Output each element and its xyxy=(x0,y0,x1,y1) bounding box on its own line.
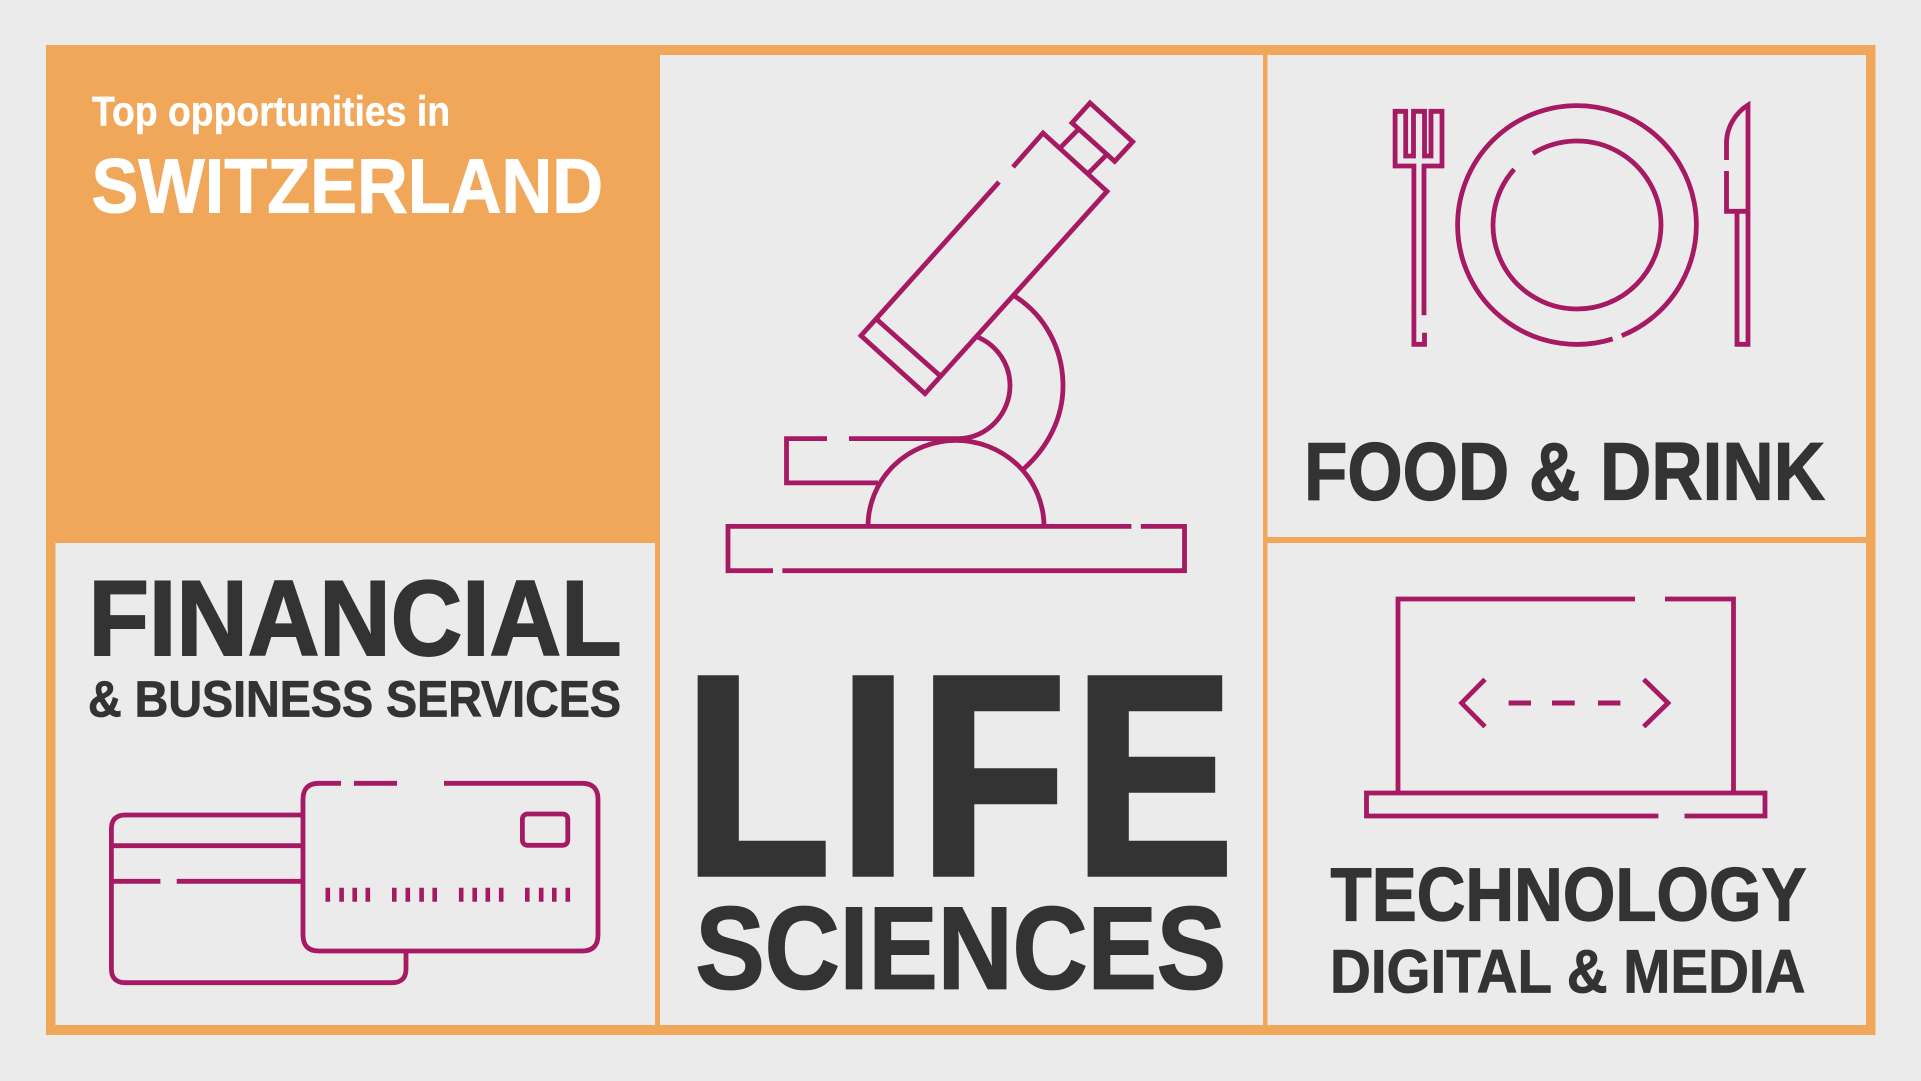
subheading: business services: & BUSINESS SERVICES xyxy=(88,670,621,727)
laptop screen xyxy=(1398,599,1734,791)
plate centre xyxy=(1493,141,1661,309)
back card stripes xyxy=(111,846,303,881)
title: SWITZERLAND xyxy=(92,143,603,229)
front card xyxy=(303,783,598,951)
back card xyxy=(111,815,406,983)
inner arm and stage xyxy=(786,337,1010,483)
left chevron xyxy=(1462,679,1485,727)
title block text xyxy=(92,88,603,229)
heading: technology: TECHNOLOGY xyxy=(1330,852,1806,936)
card number ticks xyxy=(328,888,568,902)
dome base xyxy=(868,440,1044,526)
subtitle: Top opportunities in xyxy=(92,88,450,135)
heading: LIFE: LIFE xyxy=(686,614,1232,936)
subheading: digital and media: DIGITAL & MEDIA xyxy=(1330,937,1806,1005)
heading: SCIENCES: SCIENCES xyxy=(696,883,1226,1014)
microscope tube xyxy=(861,133,1107,394)
laptop base xyxy=(1366,793,1765,816)
fork xyxy=(1395,111,1442,344)
icon: credit cards xyxy=(111,783,598,983)
plate rim xyxy=(1458,106,1696,344)
card chip xyxy=(522,814,568,845)
panel: technology, digital and media xyxy=(1268,543,1866,1025)
panel: life sciences xyxy=(660,55,1263,1025)
outer arm xyxy=(1014,296,1063,469)
knife xyxy=(1726,105,1750,344)
heading: financial: FINANCIAL xyxy=(88,558,622,678)
eyepiece xyxy=(1072,103,1133,161)
eyepiece neck xyxy=(1061,129,1106,173)
icon: laptop with code xyxy=(1366,599,1765,816)
icon: microscope xyxy=(728,103,1184,571)
heading: food and drink: FOOD & DRINK xyxy=(1304,426,1825,518)
icon: plate and cutlery xyxy=(1395,105,1750,344)
panel: food and drink xyxy=(1268,55,1866,537)
panel: financial and business services xyxy=(56,543,655,1025)
code dashes xyxy=(1509,700,1620,706)
right chevron xyxy=(1644,679,1668,727)
objective divider xyxy=(877,320,940,376)
base plate xyxy=(728,526,1184,571)
